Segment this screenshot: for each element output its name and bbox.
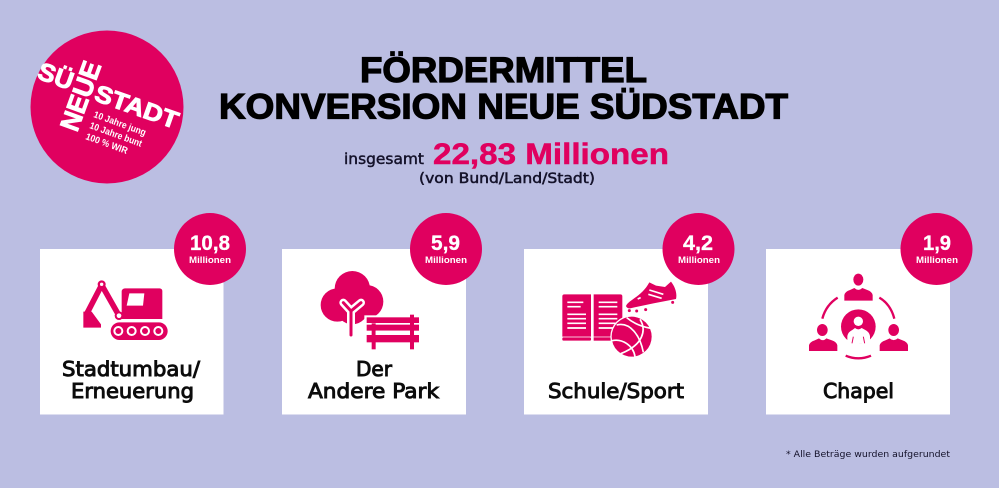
panel: Chapel [766,249,950,414]
total amount: (von Bund/Land/Stadt) [419,171,595,187]
logo: Neue Südstadt: SÜ [34,56,78,96]
label: Der [356,357,393,381]
logo: Neue Südstadt: 10 Jahre jung [92,109,148,139]
title [219,50,788,126]
badge: 1,9 Millionen [900,213,972,285]
logo: Neue Südstadt: STADT [91,80,182,135]
label [308,357,439,403]
title: KONVERSION NEUE SÜDSTADT [219,86,788,126]
total amount [344,138,669,187]
badge: 1,9 Millionen: Millionen [916,255,958,265]
badge: 1,9 Millionen: 1,9 [923,232,951,255]
logo: Neue Südstadt: 100 % WIR [84,131,129,157]
label: Stadtumbau/ [62,357,200,381]
label: Chapel [823,379,894,403]
panel: Schule/Sport [524,249,708,414]
label: Andere Park [308,379,439,403]
badge: 10,8 Millionen [174,213,246,285]
total amount: 22,83 Millionen [433,138,669,171]
badge: 10,8 Millionen: Millionen [189,255,231,265]
badge: 5,9 Millionen: Millionen [425,255,467,265]
badge: 5,9 Millionen [410,213,482,285]
badge: 10,8 Millionen: 10,8 [190,232,230,255]
icon: excavator [83,280,168,340]
footnote: * Alle Beträge wurden aufgerundet [786,450,950,460]
badge: 5,9 Millionen: 5,9 [431,232,460,255]
panel: Der Andere Park [282,249,466,414]
badge: 4,2 Millionen [662,213,734,285]
badge: 4,2 Millionen: Millionen [678,255,720,265]
icon: tree and bench [321,271,421,349]
logo: Neue Südstadt [30,30,184,184]
label: Schule/Sport [548,379,684,403]
badge: 4,2 Millionen: 4,2 [683,232,713,255]
panel: Stadtumbau/Erneuerung [40,249,224,414]
label: Erneuerung [71,379,194,403]
title: FÖRDERMITTEL [360,50,647,90]
logo: Neue Südstadt: 10 Jahre bunt [88,120,144,150]
total amount: insgesamt [344,150,424,168]
icon: group of people [809,274,908,358]
icon: book, football boot and basketball [562,282,676,358]
logo: Neue Südstadt: NEUE [54,57,107,135]
label [62,357,200,403]
